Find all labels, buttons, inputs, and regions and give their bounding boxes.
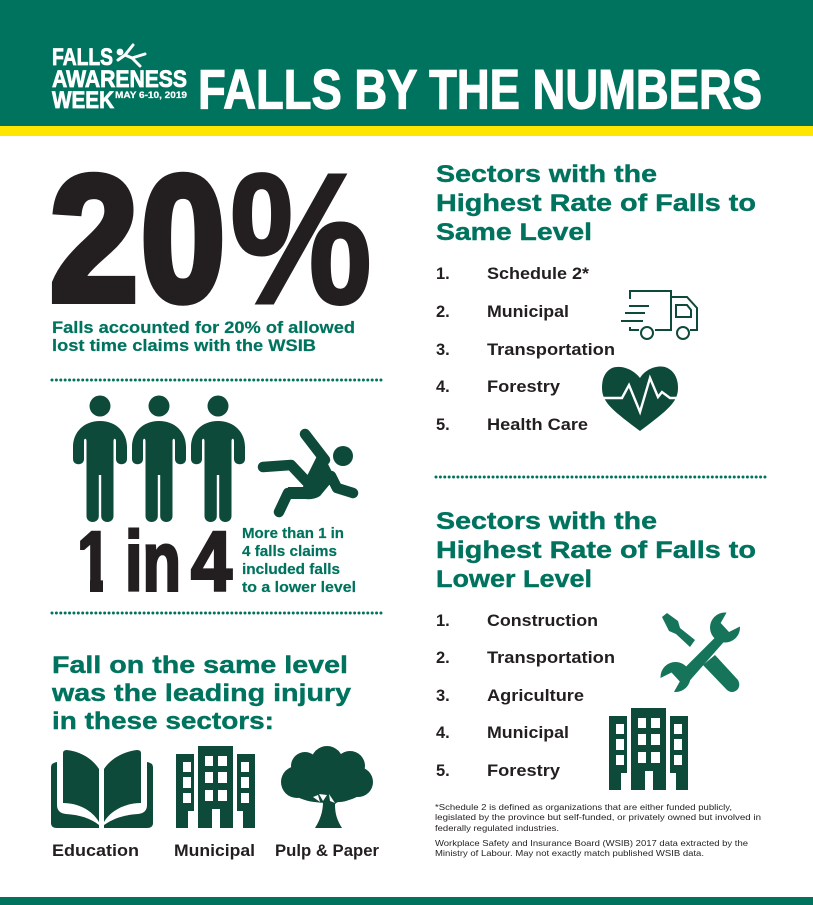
icon: open book xyxy=(51,750,153,828)
caption xyxy=(242,525,356,596)
logo: Falls Awareness Week: WEEK xyxy=(52,87,115,114)
logo: Falls Awareness Week xyxy=(52,44,187,114)
ranked list: 5. xyxy=(436,762,450,780)
icon: tree xyxy=(281,746,373,828)
heading: Same Level xyxy=(436,219,592,246)
icon: wrench and screwdriver xyxy=(658,610,743,694)
icon: building xyxy=(176,746,255,828)
sector labels: Education xyxy=(52,842,139,860)
logo: Falls Awareness Week: MAY 6-10, 2019 xyxy=(115,90,187,100)
icon: three standing people xyxy=(73,396,245,522)
ranked list: 1. xyxy=(436,265,450,283)
heading: Sectors with the xyxy=(436,161,657,188)
icon: heart with pulse xyxy=(602,367,678,431)
footnotes: Ministry of Labour. May not exactly match published WSIB data. xyxy=(435,848,704,858)
panel: falls to lower level xyxy=(436,508,756,790)
caption: Falls accounted for 20% of allowed xyxy=(52,318,355,337)
big number 20% xyxy=(50,136,372,343)
footnotes: *Schedule 2 is defined as organizations that are either funded publicly, xyxy=(435,802,732,812)
ranked list: 4. xyxy=(436,724,450,742)
big text 1 in 4: in xyxy=(125,514,181,608)
panel: leading injury sectors xyxy=(51,652,380,860)
icon: building xyxy=(609,708,688,790)
footer band xyxy=(0,897,813,905)
ranked list: Forestry xyxy=(487,378,561,396)
heading: was the leading injury xyxy=(51,680,351,707)
heading xyxy=(436,161,756,246)
ranked list: Health Care xyxy=(487,416,588,434)
ranked list: Construction xyxy=(487,612,598,630)
icon: delivery truck xyxy=(621,291,697,339)
ranked list: Transportation xyxy=(487,649,615,667)
caption: included falls xyxy=(242,561,340,578)
caption: lost time claims with the WSIB xyxy=(52,336,316,355)
sector labels: Pulp & Paper xyxy=(275,842,380,860)
big text 1 in 4: 4 xyxy=(191,514,232,608)
ranked list: 5. xyxy=(436,416,450,434)
heading: Sectors with the xyxy=(436,508,657,535)
caption: 4 falls claims xyxy=(242,543,337,560)
header banner xyxy=(0,0,813,136)
footnotes: Workplace Safety and Insurance Board (WSIB) 2017 data extracted by the xyxy=(435,838,748,848)
big text 1 in 4 xyxy=(80,528,233,592)
ranked list: 2. xyxy=(436,303,450,321)
caption xyxy=(52,318,355,355)
ranked list: Forestry xyxy=(487,762,561,780)
ranked list xyxy=(436,612,615,780)
heading xyxy=(51,652,351,735)
sector labels xyxy=(52,842,380,860)
ranked list: 3. xyxy=(436,687,450,705)
ranked list: Municipal xyxy=(487,303,569,321)
caption: More than 1 in xyxy=(242,525,344,542)
caption: to a lower level xyxy=(242,579,356,596)
footnotes: legislated by the province but self-funded, or privately owned but involved in xyxy=(435,812,761,822)
footnotes: federally regulated industries. xyxy=(435,823,559,833)
ranked list: 1. xyxy=(436,612,450,630)
panel: 20 percent statistic xyxy=(50,136,372,355)
ranked list: 3. xyxy=(436,341,450,359)
logo: Falls Awareness Week: FALLS xyxy=(52,44,113,71)
heading: in these sectors: xyxy=(52,708,274,735)
ranked list: Municipal xyxy=(487,724,569,742)
sector labels: Municipal xyxy=(174,842,255,860)
logo: Falls Awareness Week: AWARENESS xyxy=(52,66,187,93)
heading xyxy=(436,508,756,593)
ranked list: 2. xyxy=(436,649,450,667)
ranked list: Schedule 2* xyxy=(487,265,590,283)
heading: Lower Level xyxy=(436,566,592,593)
big text 1 in 4: 1 xyxy=(77,514,111,608)
big number 20%: 0 xyxy=(141,139,225,338)
heading: Highest Rate of Falls to xyxy=(436,537,756,564)
panel: falls to same level xyxy=(436,161,756,434)
big number 20%: % xyxy=(230,136,372,343)
ranked list: 4. xyxy=(436,378,450,396)
heading: Highest Rate of Falls to xyxy=(436,190,756,217)
icon: falling person xyxy=(263,434,353,512)
ranked list: Transportation xyxy=(487,341,615,359)
ranked list: Agriculture xyxy=(487,687,584,705)
panel: 1 in 4 statistic xyxy=(73,396,356,608)
big number 20%: 2 xyxy=(50,139,138,338)
ranked list xyxy=(436,265,615,434)
footnotes xyxy=(435,802,761,858)
heading: Fall on the same level xyxy=(52,652,348,679)
